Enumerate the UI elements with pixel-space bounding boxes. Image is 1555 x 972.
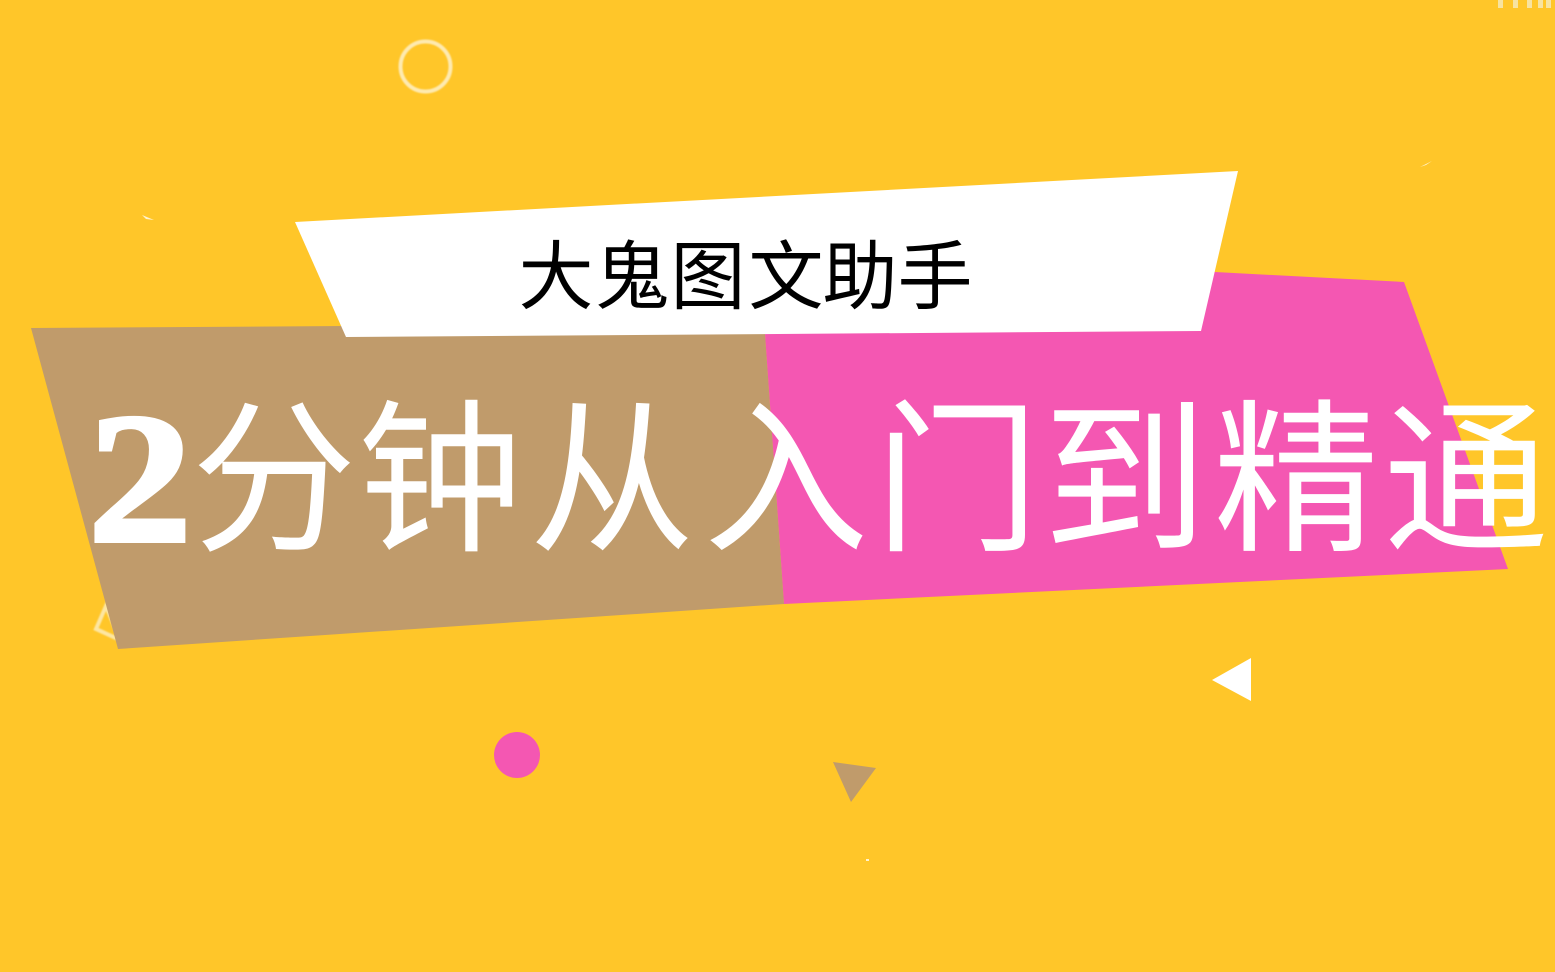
title characters: 门 [874,389,1040,573]
panel: white banner [295,171,1238,337]
subtitle: 手 [897,235,973,319]
title numeral: 2 [88,375,192,582]
title characters: 精 [1214,389,1378,573]
title characters: 到 [1042,389,1208,573]
subtitle: 鬼 [594,235,670,319]
decoration: progress ticks top right [1498,0,1551,8]
decoration: white triangle [1212,658,1251,701]
decoration: small sliver left [142,215,154,220]
panel: tan banner [31,326,784,649]
decoration: ring [400,42,450,92]
decoration: tan triangle [833,762,876,802]
subtitle [518,235,973,319]
subtitle: 图 [670,235,746,319]
title characters: 入 [704,389,868,573]
title characters: 从 [530,389,694,573]
title [88,375,1549,582]
subtitle: 助 [822,235,898,319]
decoration: outlined triangle behind tan panel [96,606,120,640]
title characters: 分 [192,389,356,573]
title characters: 钟 [358,389,522,573]
subtitle: 文 [748,235,824,319]
title characters: 通 [1384,389,1548,573]
decoration: tiny speck [866,859,869,861]
panel: pink banner [765,272,1508,604]
subtitle: 大 [518,235,594,319]
decoration: small sliver right [1420,161,1432,167]
title characters [192,389,1548,573]
decoration: pink dot [494,732,540,778]
